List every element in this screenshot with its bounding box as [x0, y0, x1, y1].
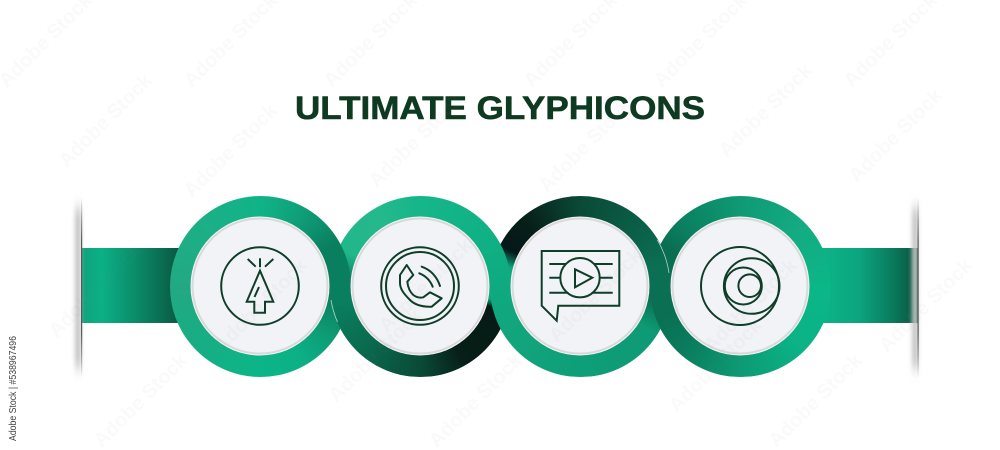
icon: video chat bubble — [542, 251, 619, 321]
watermark text: Adobe Stock — [875, 254, 977, 357]
right edge shadow — [912, 197, 919, 378]
watermark text: Adobe Stock — [375, 234, 477, 337]
watermark text: Adobe Stock — [45, 239, 147, 342]
watermark text: Adobe Stock — [665, 314, 767, 417]
watermark text: Adobe Stock — [545, 244, 647, 347]
watermark text: Adobe Stock — [715, 59, 817, 162]
watermark text: Adobe Stock — [55, 69, 157, 172]
ring hairline highlights — [331, 240, 669, 322]
watermark text: Adobe Stock — [210, 254, 312, 357]
stock credit: Adobe Stock | #538967496 — [7, 336, 19, 441]
icon: click cursor in circle — [221, 247, 299, 325]
watermark text: Adobe Stock — [90, 349, 192, 450]
watermark text: Adobe Stock — [325, 304, 427, 407]
watermark text: Adobe Stock — [765, 349, 867, 450]
icon: nested circles — [701, 247, 780, 325]
watermark text: Adobe Stock — [180, 99, 282, 202]
step 3 disc — [510, 216, 650, 356]
watermark text: Adobe Stock — [845, 84, 947, 187]
watermark text: Adobe Stock — [700, 254, 802, 357]
title: ULTIMATE GLYPHICONS — [295, 90, 705, 126]
watermark text: Adobe Stock — [365, 89, 467, 192]
left ribbon bar — [82, 248, 182, 323]
interlocking green rings — [170, 196, 824, 377]
watermark text: Adobe Stock — [425, 349, 527, 450]
right ribbon bar — [818, 248, 918, 323]
step 2 disc — [350, 216, 490, 356]
step 4 disc — [670, 216, 810, 356]
step 1 disc — [190, 216, 330, 356]
watermark text: Adobe Stock — [535, 94, 637, 197]
left edge shadow — [75, 197, 82, 378]
icon: phone call in double circle — [381, 247, 459, 325]
